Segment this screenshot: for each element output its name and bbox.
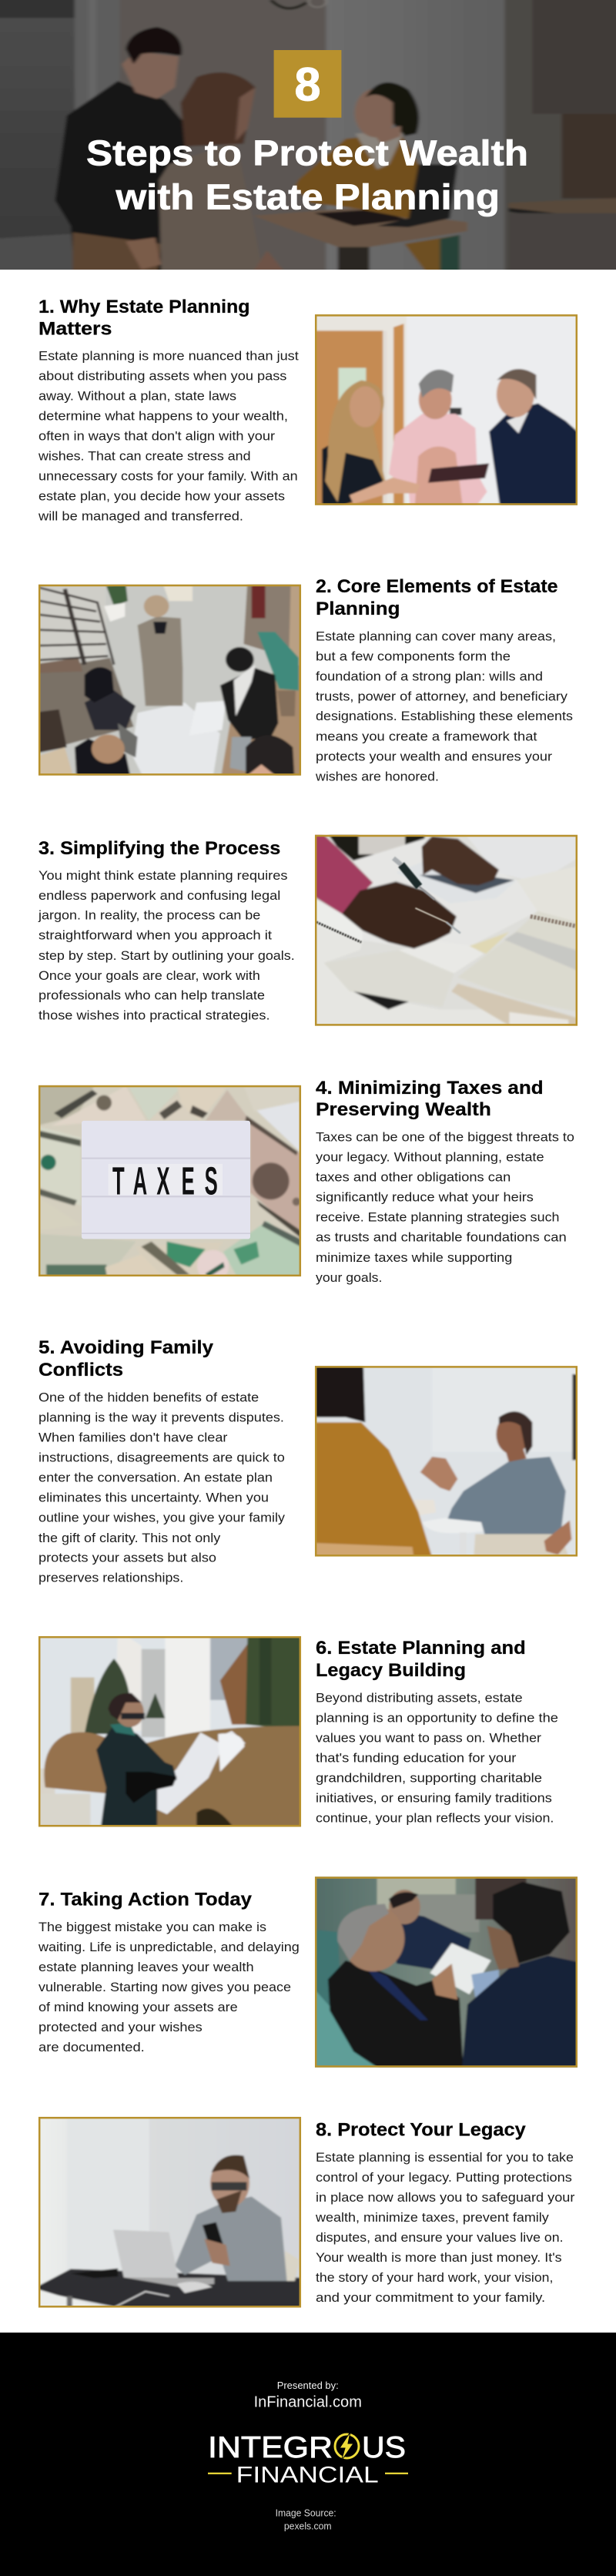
text block 3: straightforward when you approach it — [38, 928, 272, 943]
text block 5 — [38, 1390, 286, 1585]
text block 7: The biggest mistake you can make is — [38, 1920, 266, 1934]
text block 7: vulnerable. Starting now gives you peace — [38, 1980, 291, 1994]
heading 1 — [38, 297, 249, 339]
woman back — [159, 141, 263, 275]
text block 2: Estate planning can cover many areas, — [316, 629, 556, 644]
text block 8 — [315, 2150, 575, 2305]
text block 8: the story of your hard work, your vision, — [316, 2270, 553, 2285]
heading 1: Matters — [38, 318, 112, 339]
text block 3: step by step. Start by outlining your goals. — [38, 948, 295, 963]
icon: lightning bolt in circle — [335, 2432, 359, 2461]
text block 2: protects your wealth and ensures your — [316, 749, 553, 763]
heading 5 — [38, 1337, 213, 1380]
text block 5: planning is the way it prevents disputes. — [38, 1410, 284, 1425]
badge: 8: 8 — [294, 59, 320, 111]
text block 7: are documented. — [38, 2040, 145, 2054]
text block 4: Taxes can be one of the biggest threats to — [316, 1130, 574, 1145]
woman coat — [138, 616, 182, 706]
text block 3: jargon. In reality, the process can be — [38, 908, 260, 923]
center woman — [389, 414, 487, 513]
panel: 6. Estate Planning and Legacy Building — [31, 1630, 558, 1833]
image source — [276, 2508, 336, 2531]
text block 3: Once your goals are clear, work with — [38, 968, 260, 983]
text block 8: Estate planning is essential for you to take — [316, 2150, 574, 2165]
heading 7: 7. Taking Action Today — [38, 1889, 252, 1910]
text block 6: continue, your plan reflects your vision. — [316, 1810, 554, 1825]
heading 2: Planning — [316, 599, 400, 619]
right woman — [448, 1457, 566, 1543]
heading 6: 6. Estate Planning and — [316, 1638, 526, 1659]
woman advisor — [295, 133, 418, 218]
photo 1: three colleagues looking at tablet — [306, 307, 585, 513]
image source: pexels.com — [284, 2521, 332, 2531]
text block 6: that's funding education for your — [316, 1750, 517, 1765]
text block 1: often in ways that don't align with your — [38, 429, 276, 444]
photo 8: man with laptop and phone — [31, 2111, 309, 2313]
text block 1: will be managed and transferred. — [38, 508, 243, 524]
man — [489, 403, 585, 513]
logo: Integrous Financial: INTEGR — [208, 2431, 333, 2464]
logo: Integrous Financial — [208, 2431, 408, 2488]
header banner — [0, 0, 616, 275]
presented by: Presented by: — [277, 2380, 339, 2391]
text block 3: You might think estate planning requires — [38, 868, 287, 883]
text block 8: and your commitment to your family. — [316, 2290, 545, 2305]
text block 2: designations. Establishing these elements — [316, 709, 573, 723]
text block 4: minimize taxes while supporting — [316, 1250, 512, 1265]
text block 2 — [315, 629, 573, 783]
heading 5: 5. Avoiding Family — [38, 1337, 213, 1358]
text block 7: protected and your wishes — [38, 2020, 203, 2034]
text block 4: as trusts and charitable foundations can — [316, 1230, 567, 1245]
heading 1: 1. Why Estate Planning — [38, 297, 249, 317]
heading 6 — [316, 1638, 526, 1681]
text block 6: grandchildren, supporting charitable — [316, 1770, 542, 1786]
papers — [132, 703, 220, 782]
laptop — [113, 2229, 180, 2286]
sheets — [324, 950, 454, 1007]
text block 3: professionals who can help translate — [38, 988, 265, 1003]
blueprint — [143, 1731, 246, 1814]
text block 5: the gift of clarity. This not only — [38, 1531, 221, 1545]
panel: 5. Avoiding Family Conflicts — [38, 1337, 586, 1585]
title: Steps to Protect Wealth — [86, 132, 528, 173]
heading 4: Preserving Wealth — [316, 1099, 491, 1120]
left woman — [322, 435, 384, 513]
seated man — [75, 739, 132, 782]
panel: 4. Minimizing Taxes and Preserving Wealth — [36, 1078, 574, 1285]
seated woman — [85, 689, 136, 730]
sleeve — [309, 828, 373, 914]
image source: Image Source: — [276, 2508, 336, 2519]
notebook left — [309, 921, 363, 964]
man — [175, 2196, 287, 2281]
front man — [461, 1956, 585, 2074]
logo: Integrous Financial: US — [362, 2431, 406, 2464]
table — [253, 208, 467, 247]
presented by: InFinancial.com — [254, 2393, 362, 2410]
text block 2: means you create a framework that — [316, 729, 537, 744]
panel: 2. Core Elements of Estate Planning — [31, 576, 573, 783]
text block 7 — [38, 1920, 300, 2054]
standing man — [220, 668, 278, 740]
footer — [0, 2333, 616, 2576]
text block 7: waiting. Life is unpredictable, and delaying — [38, 1940, 300, 1954]
heading 2: 2. Core Elements of Estate — [316, 576, 557, 597]
title: with Estate Planning — [115, 177, 500, 217]
heading 8: 8. Protect Your Legacy — [316, 2119, 526, 2140]
text block 1: determine what happens to your wealth, — [38, 408, 288, 424]
writing hand — [342, 881, 457, 949]
text block 3: endless paperwork and confusing legal — [38, 888, 280, 903]
photo 2: team looking at plans from above — [31, 578, 309, 783]
text block 7: estate planning leaves your wealth — [38, 1960, 254, 1974]
text block 1: wishes. That can create stress and — [38, 448, 251, 464]
text block 4: receive. Estate planning strategies such — [316, 1210, 559, 1225]
background man — [387, 1910, 471, 1970]
header photo: family meeting with advisor — [0, 0, 616, 275]
text block 5: instructions, disagreements are quick to — [38, 1450, 285, 1464]
panel: 7. Taking Action Today — [38, 1870, 586, 2074]
table — [31, 2269, 309, 2313]
heading 5: Conflicts — [38, 1360, 123, 1380]
text block 5: outline your wishes, you give your family — [38, 1510, 286, 1524]
text block 8: Your wealth is more than just money. It's — [316, 2250, 562, 2265]
text block 8: wealth, minimize taxes, prevent family — [315, 2210, 550, 2225]
older man — [328, 1961, 464, 2074]
panel: 8. Protect Your Legacy — [31, 2111, 575, 2313]
photo 7: businessmen reviewing document — [306, 1870, 586, 2074]
photo 5: two women in conversation — [306, 1359, 586, 1563]
text block 5: One of the hidden benefits of estate — [38, 1390, 259, 1405]
text block 1: estate plan, you decide how your assets — [38, 489, 285, 504]
text block 6: planning is an opportunity to define the — [316, 1710, 558, 1726]
panel: 3. Simplifying the Process — [38, 828, 584, 1033]
text block 5: When families don't have clear — [38, 1430, 228, 1444]
text block 4: significantly reduce what your heirs — [316, 1189, 534, 1204]
photo 4: TAXES lightbox on dollar bills — [36, 1080, 306, 1282]
lightbox word: TAXES: TAXES — [112, 1159, 218, 1203]
text block 5: protects your assets but also — [38, 1551, 216, 1565]
text block 2: trusts, power of attorney, and beneficiary — [316, 689, 568, 703]
text block 7: of mind knowing your assets are — [38, 2000, 238, 2014]
text block 4: your legacy. Without planning, estate — [316, 1150, 544, 1165]
table — [422, 1518, 505, 1533]
woman — [96, 1725, 177, 1832]
text block 8: control of your legacy. Putting protections — [316, 2170, 572, 2185]
text block 5: eliminates this uncertainty. When you — [38, 1491, 269, 1505]
text block 2: foundation of a strong plan: wills and — [316, 669, 543, 683]
photo 3: hand writing with pen — [309, 828, 584, 1033]
text block 6: values you want to pass on. Whether — [316, 1731, 542, 1746]
text block 2: wishes are honored. — [315, 769, 439, 783]
text block 6: initiatives, or ensuring family traditions — [316, 1791, 552, 1806]
text block 1: away. Without a plan, state laws — [38, 388, 236, 403]
panel: 1. Why Estate Planning Matters — [38, 297, 585, 524]
top hand — [422, 836, 499, 885]
text block 6 — [316, 1690, 558, 1825]
right notebook — [458, 911, 584, 1013]
text block 2: but a few components form the — [316, 649, 511, 664]
text block 6: Beyond distributing assets, estate — [316, 1690, 523, 1705]
left person — [308, 1422, 434, 1563]
text block 1: about distributing assets when you pass — [38, 369, 286, 384]
photo 6: woman reading blueprint outdoors — [31, 1630, 309, 1833]
text block 4 — [316, 1130, 574, 1285]
heading 2 — [316, 576, 557, 619]
heading 6: Legacy Building — [316, 1660, 466, 1681]
text block 5: preserves relationships. — [38, 1571, 183, 1585]
text block 1: Estate planning is more nuanced than just — [38, 348, 299, 363]
text block 5: enter the conversation. An estate plan — [38, 1471, 273, 1485]
text block 4: taxes and other obligations can — [316, 1169, 511, 1185]
text block 8: in place now allows you to safeguard your — [316, 2190, 575, 2205]
logo: Integrous Financial: FINANCIAL — [236, 2463, 379, 2488]
text block 3 — [38, 868, 295, 1023]
heading 4 — [316, 1078, 544, 1120]
heading 4: 4. Minimizing Taxes and — [316, 1078, 544, 1098]
text block 8: disputes, and ensure your values live on. — [316, 2230, 564, 2245]
title — [86, 132, 528, 217]
text block 3: those wishes into practical strategies. — [38, 1008, 270, 1023]
text block 4: your goals. — [316, 1270, 382, 1285]
presented by — [254, 2380, 362, 2410]
badge: 8 — [274, 50, 341, 118]
man — [55, 81, 185, 275]
heading 3: 3. Simplifying the Process — [38, 838, 280, 859]
text block 1 — [38, 348, 299, 524]
text block 1: unnecessary costs for your family. With an — [38, 469, 298, 484]
